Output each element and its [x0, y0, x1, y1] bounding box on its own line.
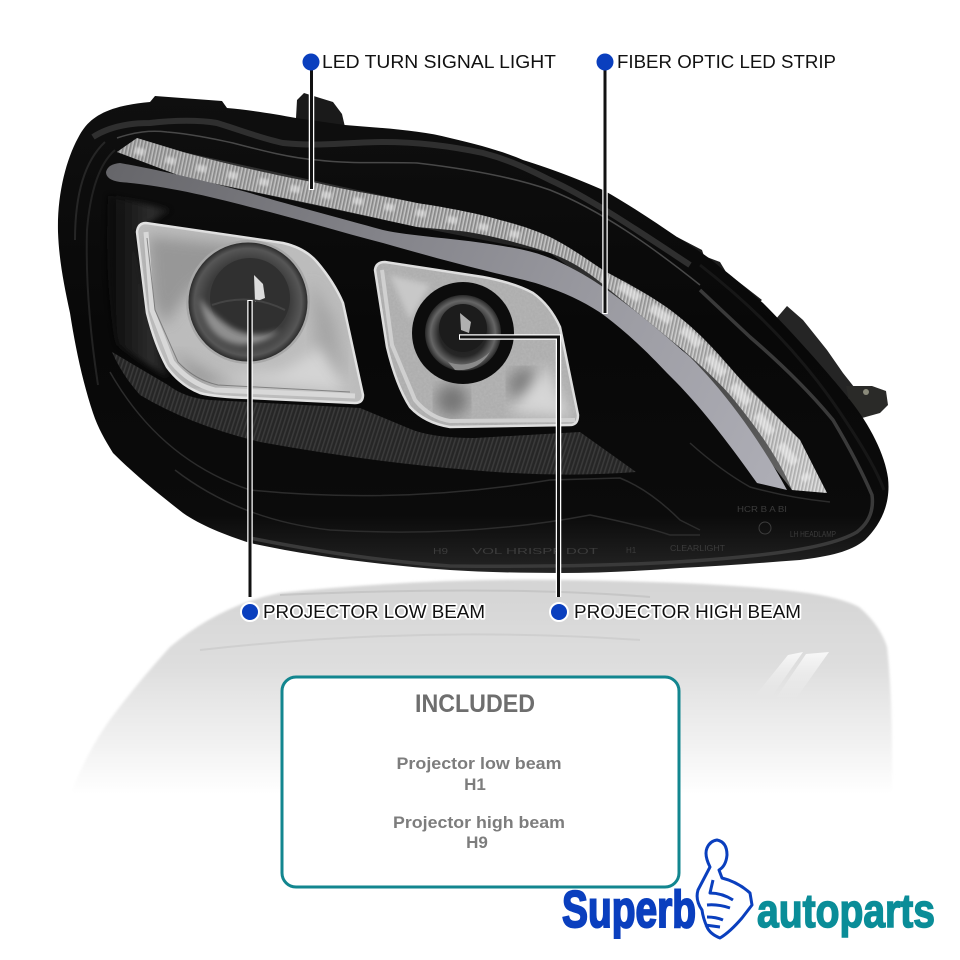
label: projector low beam: PROJECTOR LOW BEAM: [263, 602, 485, 622]
text: H9: H9: [466, 833, 488, 852]
text: low beam: Projector low beam: [396, 754, 562, 773]
connector on top: [296, 93, 345, 127]
low beam projector: [137, 223, 363, 403]
embossed markings: [433, 505, 836, 556]
heading: included: INCLUDED: [415, 690, 535, 718]
lens: [186, 240, 310, 364]
headlight reflection: [70, 580, 892, 795]
embossed markings: LH HEADLAMP: [790, 530, 836, 539]
embossed markings: CLEARLIGHT: [670, 544, 725, 553]
LED turn signal strip: [117, 138, 827, 493]
fiber optic LED strip: [106, 163, 787, 490]
icon: thumbs up: [697, 840, 752, 938]
left grey reflection inside housing: [107, 195, 170, 378]
high beam projector: [375, 262, 578, 427]
label: LED turn signal light: LED TURN SIGNAL LIGHT: [322, 52, 556, 72]
text: high beam: Projector high beam: [393, 813, 565, 832]
lower contour lines: [110, 372, 830, 535]
hatched lower band: [112, 352, 636, 475]
top bevel bands: [93, 121, 690, 265]
speckled right rim: [250, 290, 872, 566]
logo: Superb autoparts: [562, 840, 935, 939]
text: H1: H1: [464, 775, 486, 794]
callout line: LED turn signal: [309, 70, 314, 190]
label: projector high beam: PROJECTOR HIGH BEAM: [574, 602, 801, 622]
mounting tab: [846, 386, 888, 418]
lens: [412, 282, 514, 384]
embossed markings: VOL HRISPF DOT: [472, 547, 598, 556]
embossed markings: H9: [433, 547, 449, 556]
housing body: [58, 96, 888, 573]
logo word: Superb: Superb: [562, 881, 696, 939]
top edge tabs: [675, 237, 762, 306]
embossed markings: HCR B A BI: [737, 505, 787, 514]
embossed markings: H1: [626, 546, 637, 555]
callout line: fiber optic: [602, 70, 608, 314]
callout line: high beam: [459, 337, 558, 597]
side bumps: [775, 306, 858, 400]
headlight housing: [58, 93, 888, 573]
callout line: low beam: [247, 300, 253, 597]
label: fiber optic LED strip: FIBER OPTIC LED STRIP: [617, 52, 836, 72]
panel: included: [282, 677, 679, 887]
